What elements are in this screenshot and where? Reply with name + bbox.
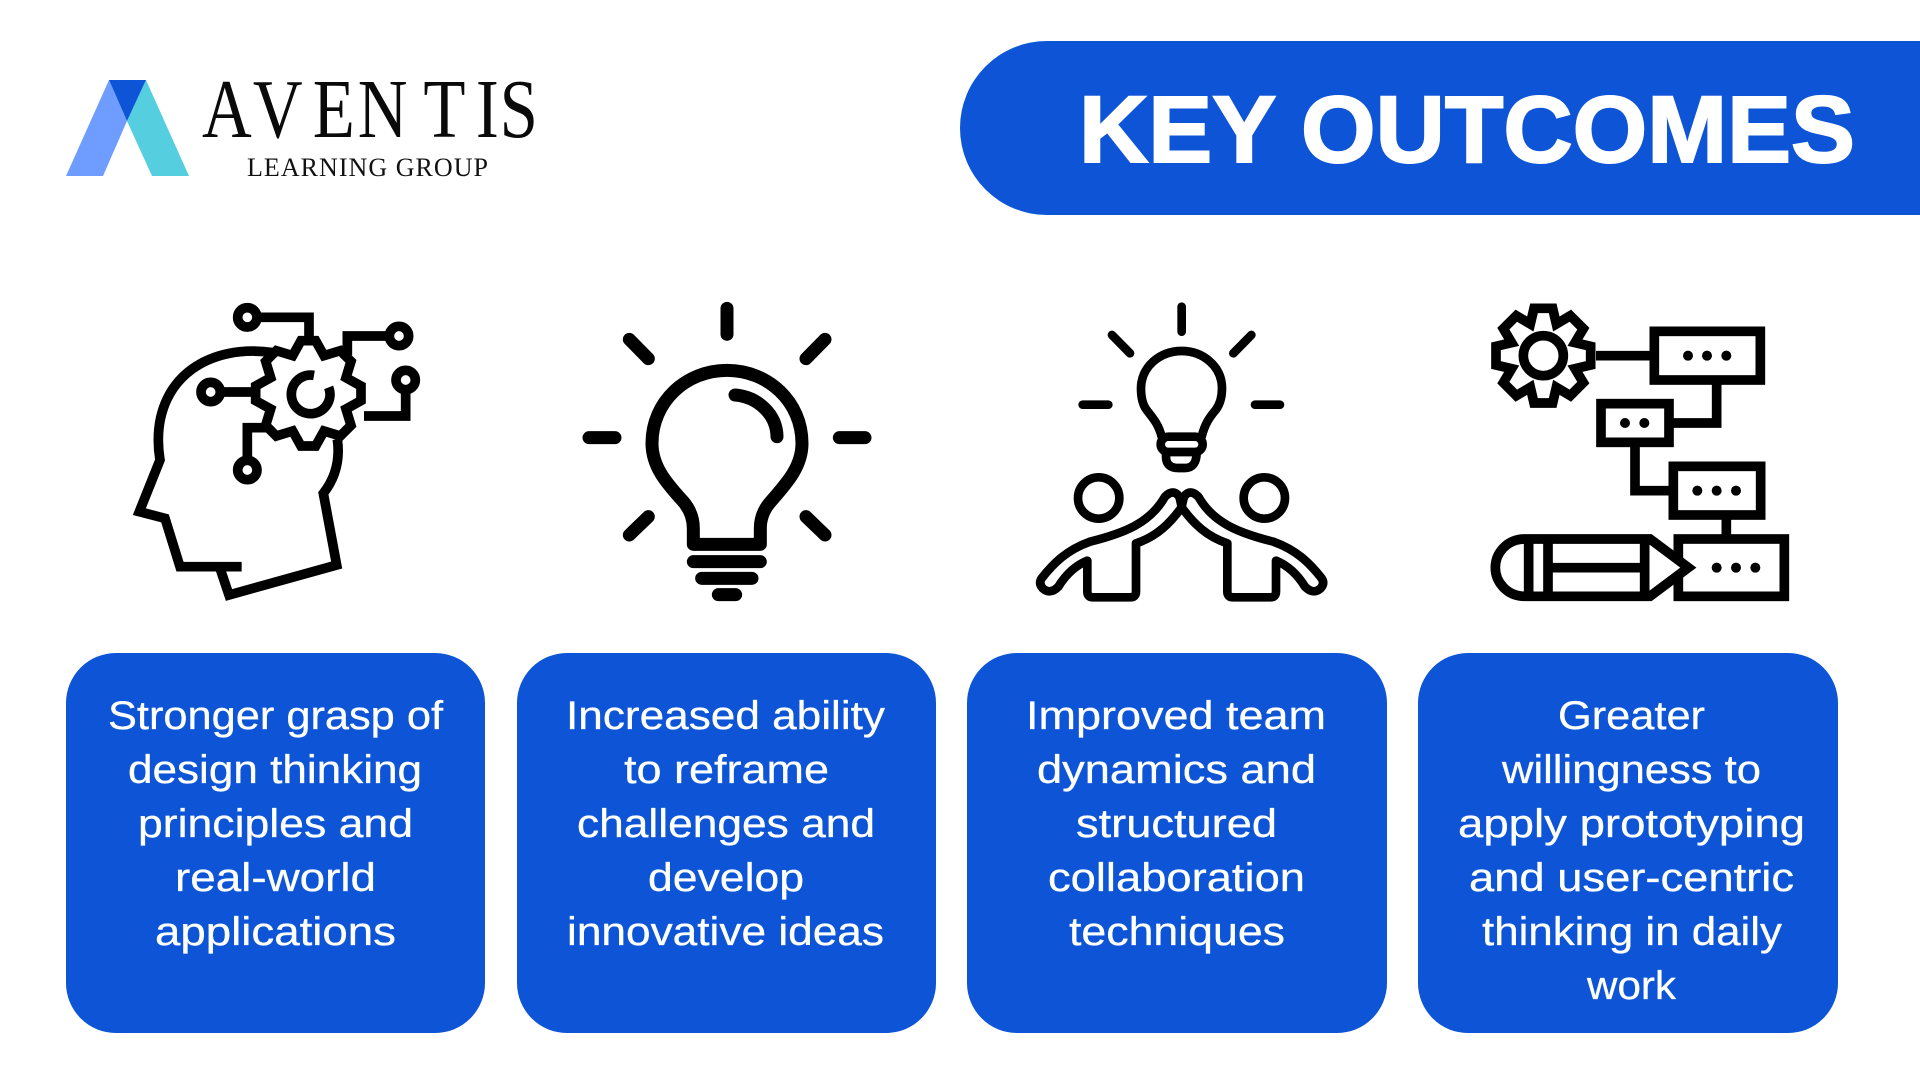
logo subtitle: LEARNING GROUP <box>247 153 488 182</box>
panel text: thinking in daily <box>1482 910 1782 954</box>
panel text: work <box>1586 964 1677 1008</box>
logo wordmark: AVENTIS <box>202 63 538 156</box>
panel: team dynamics <box>967 653 1387 1033</box>
panel text: design thinking <box>128 748 422 792</box>
panel text: innovative ideas <box>567 910 884 954</box>
logo mark <box>66 80 189 176</box>
title: KEY OUTCOMES <box>1079 77 1855 183</box>
panel text: Increased ability <box>566 694 885 738</box>
panel: design thinking principles <box>66 653 485 1033</box>
panel text: dynamics and <box>1037 748 1316 792</box>
panel text: willingness to <box>1501 748 1761 792</box>
panel text: develop <box>648 856 804 900</box>
panel text: structured <box>1076 802 1277 846</box>
panel text: Greater <box>1558 694 1705 738</box>
panel text: collaboration <box>1048 856 1305 900</box>
panel: reframing and innovation <box>517 653 936 1033</box>
panel text <box>566 694 885 954</box>
panel text <box>1026 694 1326 954</box>
panel text: principles and <box>138 802 413 846</box>
panel text: techniques <box>1069 910 1285 954</box>
logo: Aventis Learning Group <box>66 63 538 182</box>
panel text: applications <box>155 910 396 954</box>
title banner <box>960 41 1920 215</box>
icon: light bulb <box>589 308 865 595</box>
panel text <box>1458 694 1805 1008</box>
panel text <box>108 694 444 954</box>
icon: process flow with gear and pencil <box>1495 308 1784 596</box>
panel text: and user-centric <box>1469 856 1794 900</box>
panel text: to reframe <box>624 748 829 792</box>
icon: head with gear and circuits <box>139 308 415 595</box>
panel text: challenges and <box>577 802 875 846</box>
panel text: Improved team <box>1026 694 1326 738</box>
icon: two people high five under a bulb <box>1040 307 1323 597</box>
panel text: apply prototyping <box>1458 802 1805 846</box>
panel text: real-world <box>175 856 376 900</box>
panel text: Stronger grasp of <box>108 694 444 738</box>
panel: prototyping and user-centric thinking <box>1418 653 1838 1033</box>
